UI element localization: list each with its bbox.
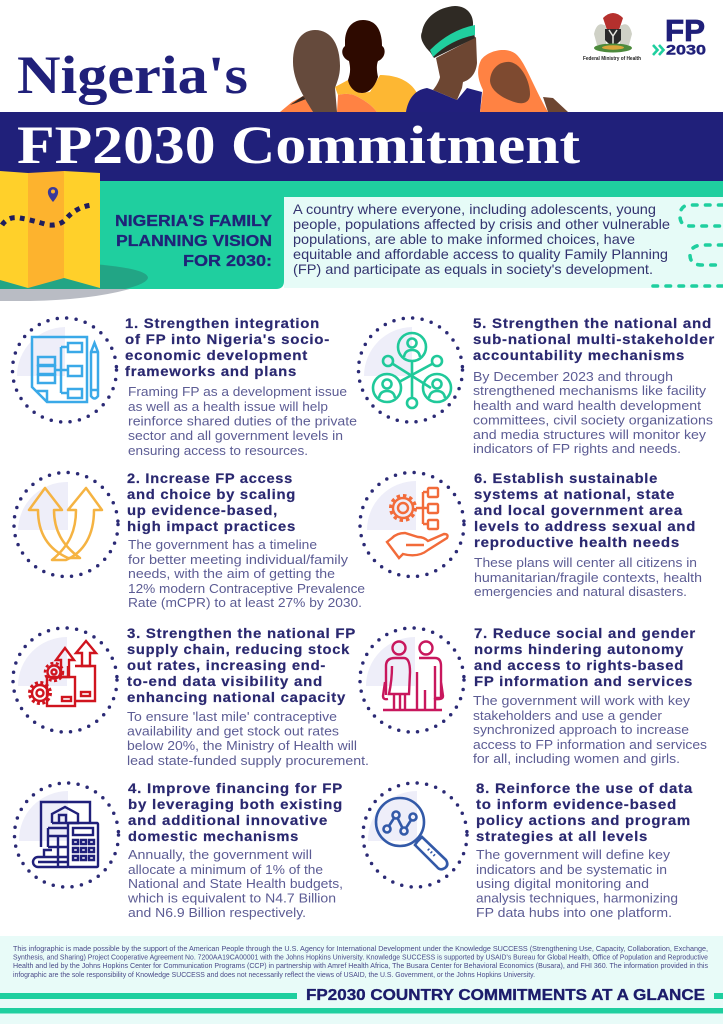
heading: FP information and services	[474, 673, 693, 689]
heading: strategies at all levels	[476, 828, 648, 844]
heading: supply chain, reducing stock	[127, 641, 350, 657]
body text: Rate (mCPR) to at least 27% by 2030.	[128, 595, 362, 610]
heading: high impact practices	[127, 518, 296, 534]
panel: commitment 8	[363, 780, 693, 920]
heading: 8. Reinforce the use of data	[476, 780, 693, 796]
title band	[0, 112, 723, 181]
heading: 4. Improve financing for FP	[128, 780, 343, 796]
vision statement: equitable and affordable access to quality Family Planning	[293, 246, 668, 262]
body text	[127, 709, 369, 768]
body text: synchronized approach to increase	[473, 722, 689, 737]
icon: crossing arrows	[14, 472, 118, 576]
body text: using digital monitoring and	[476, 876, 649, 891]
vision statement: A country where everyone, including adolescents, young	[293, 201, 656, 217]
footer heading: FP2030 COUNTRY COMMITMENTS AT A GLANCE	[306, 987, 705, 1004]
panel: commitment 5	[358, 315, 715, 456]
heading: to inform evidence-based	[476, 796, 677, 812]
icon: framework document	[12, 318, 116, 422]
vision heading: PLANNING VISION	[116, 233, 272, 250]
heading	[476, 780, 693, 844]
vision text panel	[284, 197, 723, 288]
vision statement: people, populations affected by crisis and other vulnerable	[293, 216, 670, 232]
heading: by leveraging both existing	[128, 796, 343, 812]
body text: and N6.9 Billion respectively.	[128, 905, 306, 920]
body text: humanitarian/fragile contexts, health	[474, 570, 702, 585]
body text: Framing FP as a development issue	[128, 384, 347, 399]
body text: stakeholders and use a gender	[473, 708, 663, 723]
footer rule left	[0, 993, 297, 999]
body text: 12% modern Contraceptive Prevalence	[128, 581, 365, 596]
logo: FP2030: FP	[665, 14, 705, 48]
body text: availability and get stock out rates	[127, 724, 340, 738]
heading	[125, 315, 330, 379]
heading: and additional innovative	[128, 812, 328, 828]
heading: policy actions and program	[476, 812, 691, 828]
body text: sector and all government levels in	[128, 428, 343, 443]
icon: budget calculator and house	[14, 783, 118, 887]
heading: economic development	[125, 347, 308, 363]
heading: out rates, increasing end-	[127, 657, 326, 673]
body text: and media structures will monitor key	[473, 427, 707, 442]
heading: sub-national multi-stakeholder	[473, 331, 715, 347]
body text: indicators and be systematic in	[476, 862, 667, 877]
footer rule right	[714, 993, 723, 999]
heading: enhancing national capacity	[127, 689, 346, 705]
icon: folded map	[0, 171, 100, 288]
vision heading: FOR 2030:	[183, 253, 272, 270]
body text	[474, 555, 702, 599]
body text	[127, 847, 343, 920]
body text: By December 2023 and through	[473, 369, 673, 384]
panel: commitment 3	[13, 625, 369, 768]
icon: stakeholder network	[358, 318, 462, 422]
body text: as well as a health issue will help	[128, 399, 328, 414]
footer panel	[0, 936, 723, 1024]
body text: ensuring access to resources.	[128, 443, 308, 458]
heading: 2. Increase FP access	[127, 470, 293, 486]
icon: supply chain boxes and gears	[13, 628, 117, 732]
body text: reinforce shared duties of the private	[128, 414, 357, 428]
body text: below 20%, the Ministry of Health will	[127, 738, 357, 753]
title line 1: Nigeria's	[17, 45, 248, 105]
icon: gear, hierarchy and open hand	[360, 472, 464, 576]
disclaimer text: This infographic is made possible by the support of the American People through the U.S. Agency for International Development under the Knowledge SUCCESS (Strengthening Use, Capacity, Collaboration, Exchange,	[13, 944, 708, 953]
body text: To ensure 'last mile' contraceptive	[127, 709, 337, 724]
heading: of FP into Nigeria's socio-	[125, 331, 330, 347]
heading: and access to rights-based	[474, 657, 684, 673]
body text: committees, civil society organizations	[473, 412, 714, 428]
vision heading: NIGERIA'S FAMILY	[115, 213, 272, 230]
body text	[128, 384, 357, 458]
heading	[127, 470, 296, 534]
heading: 3. Strengthen the national FP	[127, 625, 356, 641]
panel: commitment 6	[360, 470, 702, 599]
body text: FP data hubs into one platform.	[476, 905, 672, 920]
body text: health and ward health development	[473, 398, 701, 413]
heading: 5. Strengthen the national and	[473, 315, 712, 331]
dotted route	[2, 205, 92, 225]
logo: FP2030: 2030	[666, 42, 706, 58]
heading	[128, 780, 343, 844]
decorative dashed shapes	[653, 205, 723, 286]
illustration: group of four people	[280, 6, 568, 112]
body text: for better meeting individual/family	[128, 552, 349, 567]
vision statement: populations, are able to make informed choices, have	[293, 231, 635, 247]
body text: indicators of FP rights and needs.	[473, 441, 681, 456]
body text	[476, 847, 678, 920]
panel: commitment 1	[12, 315, 357, 458]
heading: frameworks and plans	[125, 363, 297, 379]
disclaimer text	[13, 944, 708, 979]
vision statement: (FP) and participate as equals in society's development.	[293, 261, 653, 277]
body text: strengthened mechanisms like facility	[473, 383, 707, 398]
person: woman with green headband	[406, 6, 482, 112]
body text: These plans will center all citizens in	[474, 555, 697, 570]
icon: woman and man	[360, 628, 464, 732]
heading: 7. Reduce social and gender	[474, 625, 696, 641]
body text: The government has a timeline	[128, 537, 317, 552]
person: woman in orange hijab	[478, 50, 568, 112]
body text: needs, with the aim of getting the	[128, 566, 335, 581]
heading: accountability mechanisms	[473, 347, 685, 363]
title line 2: FP2030 Commitment	[17, 115, 580, 175]
heading: to-end data visibility and	[127, 673, 323, 689]
logo: FP2030	[653, 14, 706, 58]
disclaimer text: infographic are the sole responsibility of Knowledge SUCCESS and does not necessarily reflect the views of USAID, the U.S. Government, or the Johns Hopkins University.	[13, 970, 535, 979]
body text: allocate a minimum of 1% of the	[128, 862, 323, 877]
body text	[128, 537, 365, 610]
body text	[473, 693, 708, 766]
body text: The government will work with key	[473, 693, 691, 708]
body text: access to FP information and services	[473, 737, 708, 752]
heading: and local government area	[474, 502, 683, 518]
panel: commitment 7	[360, 625, 708, 766]
body text: analysis techniques, harmonizing	[476, 890, 678, 906]
logo: Federal Ministry of Health coat of arms	[583, 13, 641, 62]
vision heading	[115, 213, 272, 270]
logo caption: Federal Ministry of Health	[583, 56, 641, 62]
heading	[127, 625, 356, 705]
person: far left in orange top	[280, 30, 340, 112]
body text: lead state-funded supply procurement.	[127, 753, 369, 768]
heading: systems at national, state	[474, 486, 675, 502]
heading: up evidence-based,	[127, 502, 278, 518]
heading: norms hindering autonomy	[474, 641, 684, 657]
heading: domestic mechanisms	[128, 828, 299, 844]
body text: The government will define key	[476, 847, 671, 862]
body text: for all, including women and girls.	[473, 751, 680, 766]
heading	[473, 315, 715, 363]
panel: vision banner	[0, 171, 723, 301]
heading: levels to address sexual and	[474, 518, 696, 534]
heading: reproductive health needs	[474, 534, 680, 550]
icon: map pin	[48, 187, 58, 202]
heading: 1. Strengthen integration	[125, 315, 320, 331]
icon: magnifier over data chart	[363, 783, 467, 887]
body text	[473, 369, 714, 456]
body text: which is equivalent to N4.7 Billion	[127, 890, 336, 906]
body text: National and State Health budgets,	[128, 876, 343, 891]
panel: commitment 4	[14, 780, 343, 920]
map shadow	[0, 262, 148, 301]
body text: Annually, the government will	[128, 847, 312, 862]
footer rule full width	[0, 1008, 723, 1014]
person: man in yellow top	[335, 20, 417, 112]
heading	[474, 470, 696, 550]
heading	[474, 625, 696, 689]
heading: 6. Establish sustainable	[474, 470, 658, 486]
vision statement	[293, 201, 670, 277]
panel: commitment 2	[14, 470, 365, 610]
heading: and choice by scaling	[127, 486, 296, 502]
body text: emergencies and natural disasters.	[474, 584, 687, 599]
